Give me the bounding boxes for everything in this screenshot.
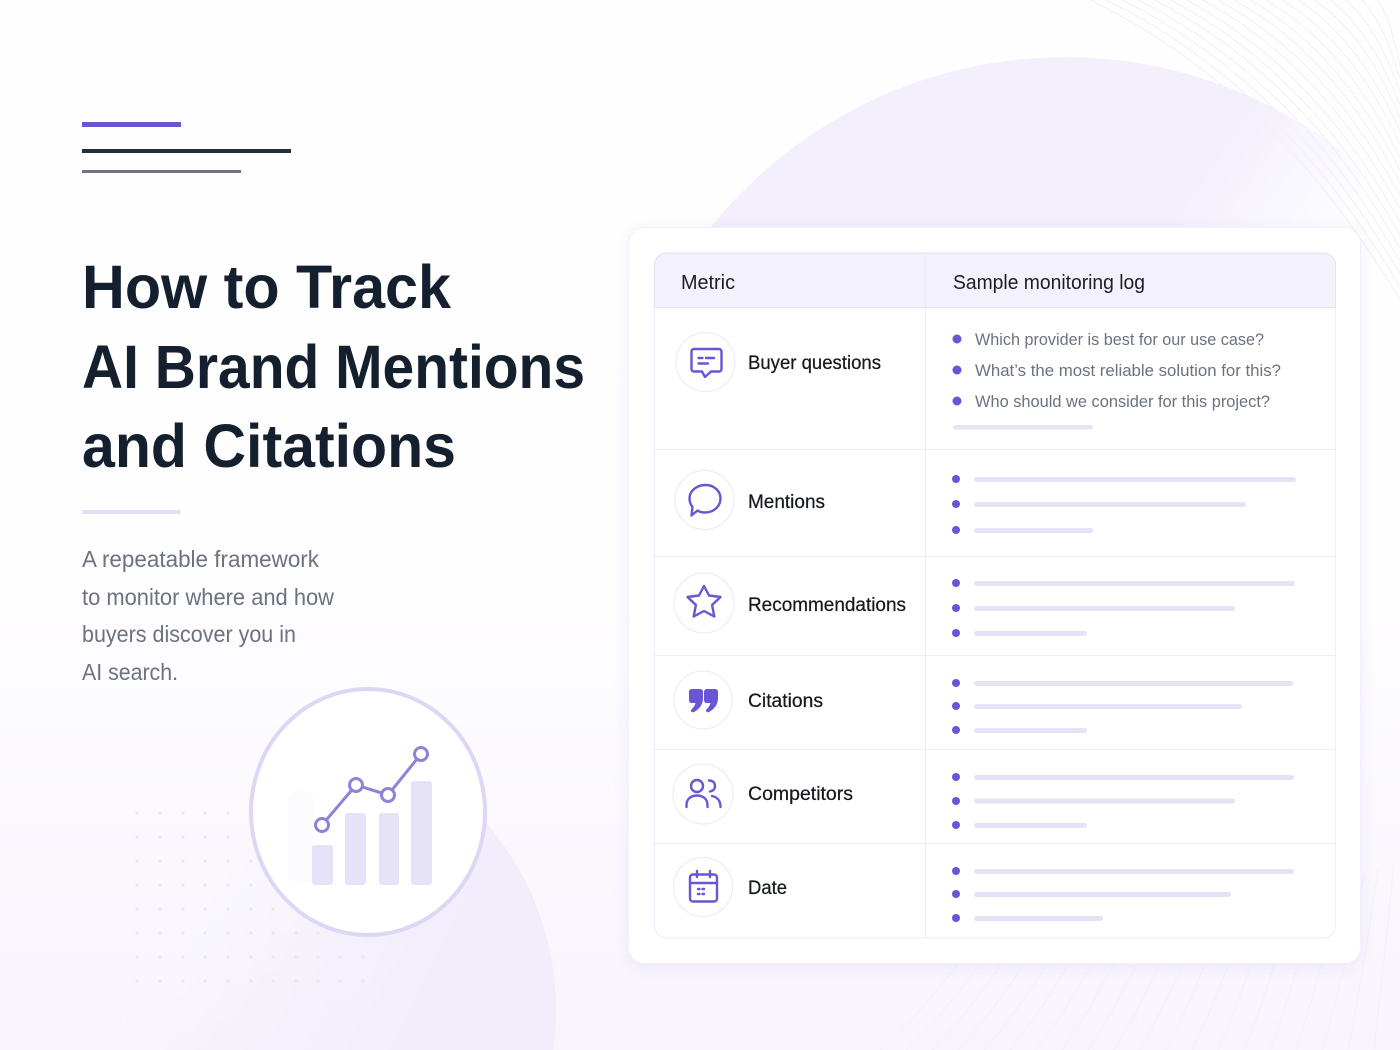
subtitle: to monitor where and how [82, 584, 334, 610]
dot grid [135, 811, 365, 983]
row: competitors [673, 764, 1294, 829]
trend line [316, 748, 428, 832]
icon: speech bubble [675, 470, 734, 530]
subtitle: buyers discover you in [82, 621, 296, 647]
subtitle: A repeatable framework [82, 546, 319, 572]
ghost bar [288, 791, 314, 883]
row: date [674, 858, 1294, 922]
icon: question speech box [676, 332, 735, 392]
table header: Sample monitoring log [953, 272, 1145, 294]
subtitle: AI search. [82, 659, 178, 685]
row: mentions [675, 470, 1296, 534]
sample questions: Which provider is best for our use case? [975, 331, 1264, 349]
title: and Citations [82, 412, 456, 480]
sample questions: Who should we consider for this project? [975, 393, 1270, 411]
icon: calendar [674, 858, 732, 916]
contour lines: top right [1090, 0, 1400, 300]
subtitle [82, 546, 334, 685]
log placeholder lines [952, 867, 1294, 922]
contour lines: bottom right [880, 865, 1394, 1050]
log placeholder lines [952, 579, 1295, 637]
row: date: Date [748, 877, 787, 899]
log placeholder lines [952, 773, 1294, 829]
table frame and grid [654, 253, 1336, 938]
sample questions [952, 331, 1281, 430]
row: buyer questions [676, 331, 1281, 430]
background circle: bottom left [0, 724, 556, 1050]
row: buyer questions: Buyer questions [748, 352, 881, 374]
icon: quotation marks [674, 671, 732, 729]
table header [654, 253, 1336, 308]
row: citations: Citations [748, 690, 823, 712]
row: recommendations [674, 573, 1295, 637]
row: citations [674, 671, 1293, 734]
background circle: top right [628, 57, 1361, 400]
icon: two people [673, 764, 733, 824]
title divider [82, 510, 181, 514]
title [82, 253, 585, 480]
log placeholder lines [952, 679, 1293, 734]
table header: Metric [681, 272, 735, 294]
panel: monitoring card [628, 228, 1360, 964]
bar chart [312, 781, 432, 885]
title: AI Brand Mentions [82, 333, 585, 401]
icon: star [674, 573, 734, 633]
sample questions: What’s the most reliable solution for this? [975, 362, 1281, 380]
row: recommendations: Recommendations [748, 594, 906, 616]
icon: analytics chart in circle [251, 689, 485, 935]
row: competitors: Competitors [748, 783, 853, 805]
decorative header rules [82, 122, 291, 173]
log placeholder lines [952, 475, 1296, 534]
row: mentions: Mentions [748, 491, 825, 513]
title: How to Track [82, 253, 451, 321]
